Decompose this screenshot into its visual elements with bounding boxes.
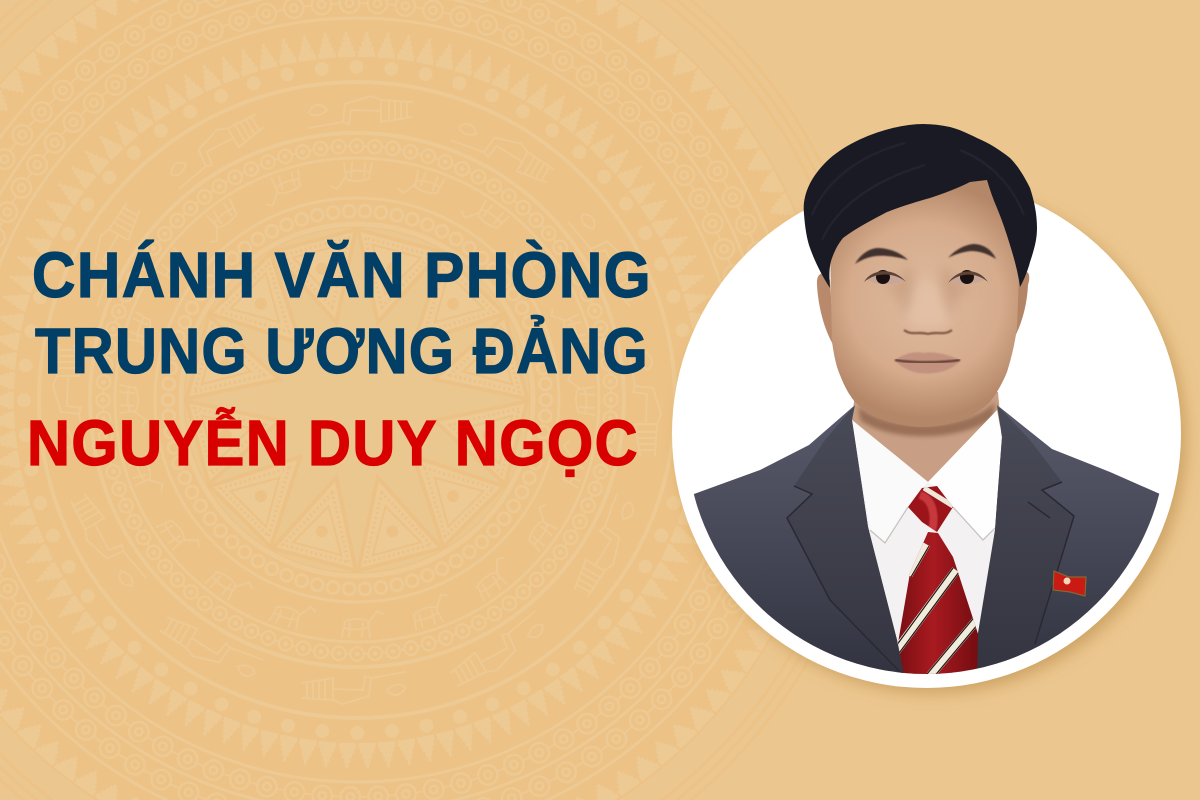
outer ring lines bbox=[0, 0, 878, 800]
portrait figure bbox=[694, 124, 1160, 674]
party pin bbox=[1053, 571, 1086, 596]
left lapel bbox=[787, 405, 903, 680]
torso bbox=[694, 392, 1160, 674]
dot ring bbox=[24, 67, 690, 733]
collar shadows bbox=[870, 507, 995, 543]
shirt collar left bbox=[852, 420, 928, 543]
left eyebrow bbox=[855, 248, 908, 264]
shirt collar right bbox=[928, 410, 1002, 540]
neck bbox=[852, 392, 1001, 482]
triangle ring bbox=[0, 34, 723, 766]
shirt bbox=[852, 420, 1002, 680]
jacket bbox=[694, 406, 1160, 674]
face bbox=[830, 170, 1020, 427]
drum disk bbox=[0, 0, 835, 800]
bird band bbox=[53, 96, 661, 704]
tie blade bbox=[898, 532, 978, 674]
right ear bbox=[1012, 272, 1029, 342]
right lapel bbox=[977, 405, 1074, 680]
white circle bbox=[672, 179, 1181, 688]
right eye bbox=[948, 270, 988, 284]
hair highlights bbox=[812, 143, 1024, 240]
hair bbox=[804, 124, 1037, 288]
medallion shadow bbox=[680, 187, 1186, 693]
title line 2: TRUNG ƯƠNG ĐẢNG bbox=[35, 314, 649, 387]
portrait medallion bbox=[660, 124, 1190, 700]
mouth bbox=[895, 352, 960, 374]
double chain of circles bbox=[0, 0, 784, 800]
deer band bbox=[120, 163, 594, 637]
inner chains bbox=[103, 146, 611, 654]
facial shading bbox=[880, 263, 975, 318]
left eye bbox=[864, 270, 906, 284]
nose bbox=[904, 280, 952, 334]
left ear bbox=[817, 274, 834, 346]
central star triangles bbox=[186, 229, 528, 571]
title line 1: CHÁNH VĂN PHÒNG bbox=[32, 239, 652, 311]
title: position bbox=[32, 239, 652, 387]
chin shadow bbox=[858, 402, 995, 436]
name: NGUYỄN DUY NGỌC bbox=[27, 407, 639, 479]
outer tooth ring bbox=[0, 0, 830, 800]
bronze drum pattern background bbox=[0, 0, 878, 800]
inner bands bbox=[39, 82, 675, 718]
right eyebrow bbox=[948, 244, 996, 259]
lapel edges bbox=[787, 482, 1074, 675]
tie knot bbox=[908, 486, 953, 532]
central star disk bbox=[185, 228, 529, 572]
